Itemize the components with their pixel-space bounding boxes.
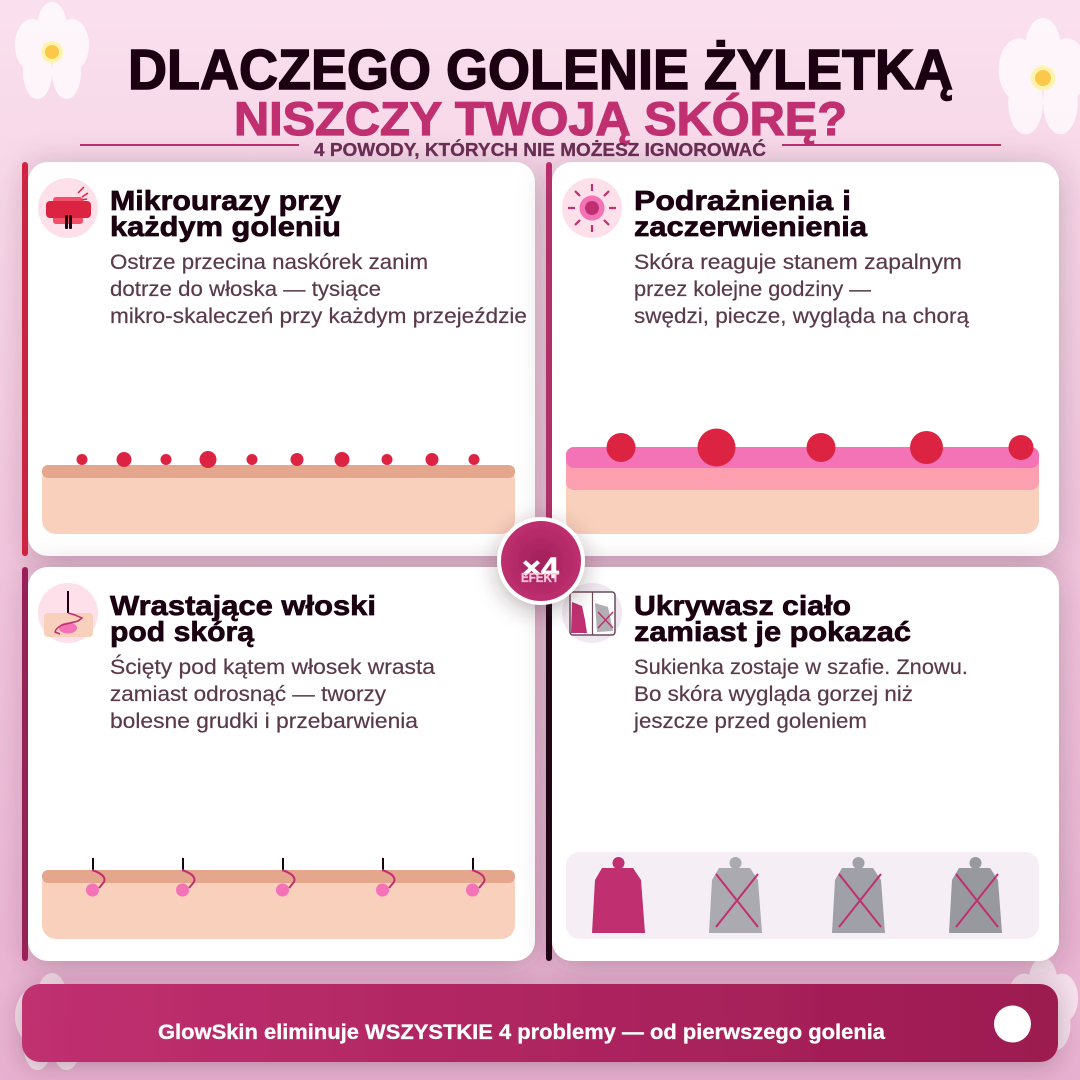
body text: zamiast odrosnąć — tworzy: [110, 683, 387, 706]
icon: inflamed spot: [562, 178, 622, 238]
heading: [110, 185, 341, 242]
skin illustration: cuts: [42, 451, 515, 534]
body text: [633, 656, 968, 733]
panel: microcuts: [22, 162, 535, 556]
body text: przez kolejne godziny —: [634, 278, 871, 301]
body text: [634, 251, 969, 328]
body text: [110, 251, 527, 328]
center badge: ×4: [522, 552, 559, 585]
body text: Skóra reaguje stanem zapalnym: [634, 251, 962, 274]
icon: ingrown hair: [38, 583, 98, 643]
panel: irritation: [546, 162, 1059, 556]
bottom banner: GlowSkin eliminuje WSZYSTKIE 4 problemy — od pierwszego golenia: [158, 1021, 885, 1044]
body text: jeszcze przed goleniem: [633, 710, 867, 733]
body text: swędzi, piecze, wygląda na chorą: [634, 305, 969, 328]
center badge: EFEKT: [521, 570, 559, 585]
body text: [110, 655, 435, 733]
flower: top right: [999, 18, 1080, 134]
heading: [110, 590, 376, 647]
heading: każdym goleniu: [110, 211, 341, 242]
icon: wardrobe: [562, 583, 622, 643]
body text: mikro-skaleczeń przy każdym przejeździe: [110, 305, 527, 328]
heading: Wrastające włoski: [110, 590, 376, 621]
panel: ingrown hairs: [22, 567, 535, 961]
skin illustration: hairs: [42, 858, 515, 939]
flower: bottom right: [1008, 958, 1078, 1050]
body text: dotrze do włoska — tysiące: [110, 278, 381, 301]
heading: zaczerwienienia: [634, 211, 867, 242]
heading: [634, 185, 867, 242]
subtitle with rules: 4 POWODY, KTÓRYCH NIE MOŻESZ IGNOROWAĆ: [314, 139, 766, 160]
body text: Bo skóra wygląda gorzej niż: [634, 683, 913, 706]
body text: Sukienka zostaje w szafie. Znowu.: [634, 656, 968, 679]
heading: Mikrourazy przy: [110, 185, 341, 216]
center badge: [499, 519, 583, 603]
flower: top left: [15, 2, 89, 99]
body text: Ścięty pod kątem włosek wrasta: [110, 655, 435, 679]
title line 2: NISZCZY TWOJĄ SKÓRĘ?: [234, 92, 847, 145]
title line 1: DLACZEGO GOLENIE ŻYLETKĄ: [128, 38, 953, 102]
heading: pod skórą: [110, 616, 254, 647]
body text: Ostrze przecina naskórek zanim: [110, 251, 428, 274]
heading: [634, 590, 911, 647]
heading: Podrażnienia i: [634, 185, 851, 216]
body text: bolesne grudki i przebarwienia: [110, 710, 418, 733]
heading: zamiast je pokazać: [634, 616, 911, 647]
panel: hiding body: [546, 567, 1059, 961]
dress row: [566, 852, 1039, 939]
skin illustration: inflammation: [566, 428, 1039, 534]
bottom banner: [22, 984, 1058, 1062]
heading: Ukrywasz ciało: [634, 590, 851, 621]
icon: razor: [38, 178, 98, 238]
flower: bottom left: [15, 973, 89, 1070]
